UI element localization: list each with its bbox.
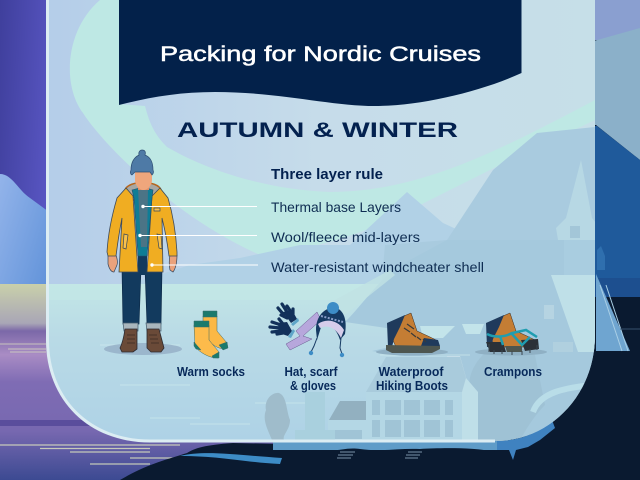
callout lines bbox=[138, 205, 258, 267]
aurora swoosh bbox=[70, 0, 595, 255]
beanie bbox=[130, 150, 153, 175]
jacket bbox=[107, 188, 177, 272]
icon: hiking boot bbox=[376, 313, 448, 356]
hands bbox=[108, 255, 177, 272]
shoreline island bbox=[120, 420, 600, 480]
background: right sky, mountain and shoreline bbox=[590, 0, 640, 480]
scarf bbox=[286, 312, 321, 350]
heading: season: AUTUMN & WINTER bbox=[177, 119, 458, 142]
item labels: & gloves bbox=[290, 379, 336, 393]
hat bbox=[316, 308, 346, 340]
item labels: Crampons bbox=[484, 365, 542, 379]
panel border bbox=[48, 0, 495, 441]
neck and face bbox=[138, 183, 149, 190]
distant mountains bbox=[141, 192, 454, 284]
item labels: Warm socks bbox=[177, 365, 245, 379]
layer rule text block: Wool/fleece mid-layers bbox=[271, 229, 420, 245]
background: left sky and sea bbox=[0, 0, 300, 480]
upper glove bbox=[278, 304, 299, 326]
title: Packing for Nordic Cruises bbox=[160, 43, 481, 66]
item labels bbox=[177, 365, 542, 393]
big mountain bbox=[454, 127, 595, 240]
fleece mid-layer bbox=[132, 187, 153, 256]
sea ice bbox=[47, 284, 447, 441]
trouser cuffs bbox=[123, 323, 161, 331]
layer rule text block bbox=[271, 166, 484, 275]
trousers bbox=[122, 268, 162, 324]
church tower bbox=[556, 161, 595, 240]
figure: man in layered winter clothes bbox=[104, 150, 182, 355]
layer rule text block: Water-resistant windcheater shell bbox=[271, 259, 484, 275]
item labels: Hiking Boots bbox=[376, 379, 448, 393]
layer rule text block: Three layer rule bbox=[271, 166, 383, 183]
title banner bbox=[119, 0, 522, 106]
item labels: Hat, scarf bbox=[284, 365, 338, 379]
icon: crampons on boot bbox=[475, 313, 547, 356]
hood bbox=[122, 182, 164, 200]
lower glove bbox=[270, 319, 295, 338]
icon: warm socks bbox=[194, 311, 228, 358]
item labels: Waterproof bbox=[378, 365, 444, 379]
icon: hat, scarf and gloves bbox=[270, 302, 346, 357]
boots bbox=[120, 329, 164, 352]
thermal base layer bbox=[138, 189, 148, 247]
foreground slope bbox=[346, 284, 595, 441]
layer rule text block: Thermal base Layers bbox=[271, 199, 401, 215]
tree silhouette bbox=[265, 393, 290, 440]
harbour buildings bbox=[366, 357, 470, 392]
dark foreground trees bbox=[502, 438, 521, 441]
jacket pockets bbox=[123, 208, 162, 249]
lighthouse bbox=[305, 392, 335, 440]
large roof bbox=[551, 275, 595, 352]
